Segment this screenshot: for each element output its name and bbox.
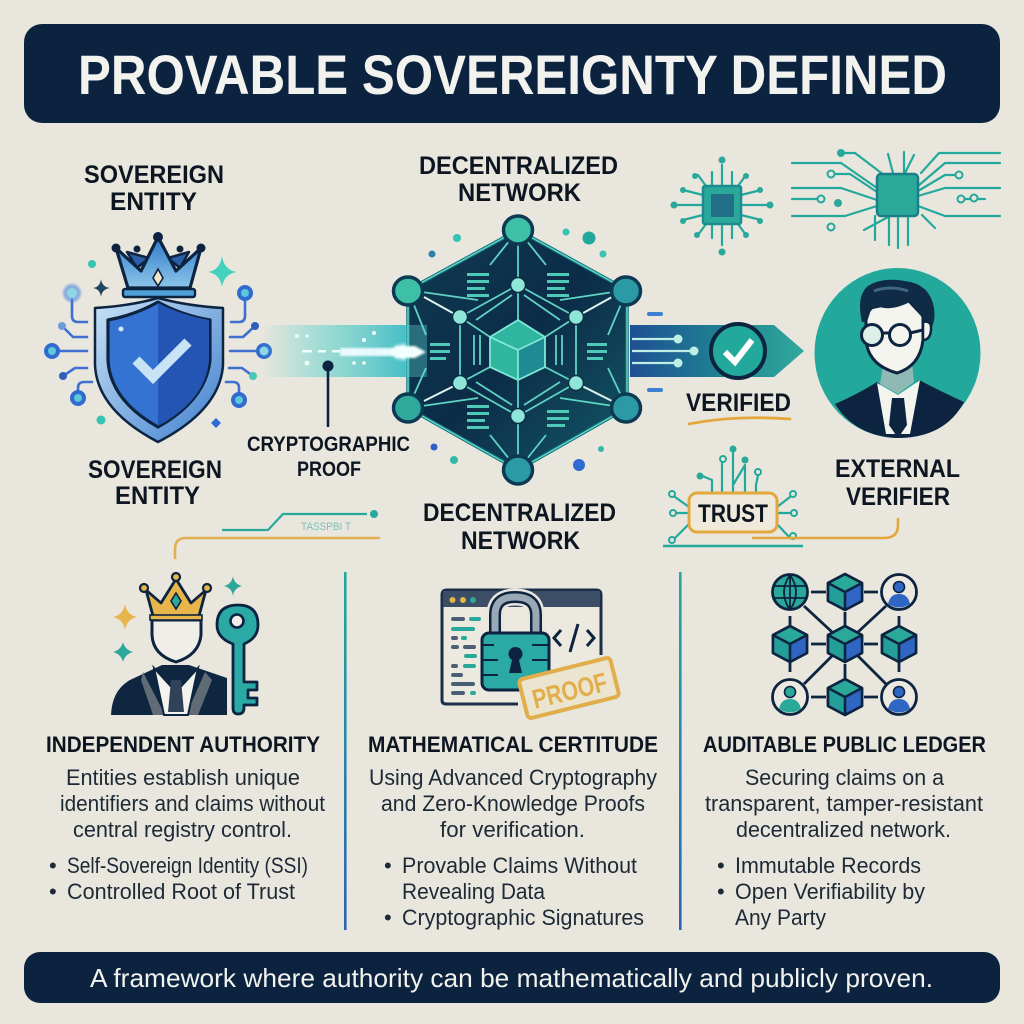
label: sovereign entity (top) xyxy=(84,161,224,216)
description: and Zero-Knowledge Proofs xyxy=(381,791,645,816)
description xyxy=(705,765,983,842)
network: hexagon of nodes xyxy=(394,216,640,484)
shield xyxy=(95,298,223,442)
crown xyxy=(146,579,206,616)
bullets: Cryptographic Signatures xyxy=(402,905,644,930)
label: sovereign entity (bottom): ENTITY xyxy=(115,482,200,510)
connector: orange and teal lines to column one xyxy=(175,510,379,558)
padlock xyxy=(482,597,549,690)
icon: shield with crown and circuits xyxy=(44,232,272,442)
callout: cryptographic proof xyxy=(247,360,410,481)
label: sovereign entity (top): ENTITY xyxy=(110,188,197,216)
globe xyxy=(772,574,808,610)
center cube xyxy=(490,320,545,380)
label: external verifier: EXTERNAL xyxy=(835,455,960,483)
bullets: • xyxy=(49,879,57,904)
floating dots xyxy=(428,228,606,471)
icon: proof lock in browser xyxy=(442,590,619,719)
code glyph xyxy=(554,624,594,652)
sparkles xyxy=(113,604,137,630)
label: sovereign entity (bottom): SOVEREIGN xyxy=(88,456,222,484)
title banner xyxy=(24,24,1000,123)
icon: small chip xyxy=(670,156,774,256)
description: Entities establish unique xyxy=(66,765,300,790)
heading: AUDITABLE PUBLIC LEDGER xyxy=(703,732,986,757)
label: decentralized network (top): DECENTRALIZED xyxy=(419,152,618,180)
bullets: Any Party xyxy=(735,905,826,930)
bullets: Immutable Records xyxy=(735,853,921,878)
icon: trust circuit: TRUST xyxy=(698,500,768,528)
key xyxy=(217,605,258,714)
bullets: Controlled Root of Trust xyxy=(67,879,295,904)
label: decentralized network (bottom): NETWORK xyxy=(461,527,580,555)
panel: mathematical certitude xyxy=(368,732,658,930)
proof stamp: PROOF xyxy=(529,667,610,715)
bullets: • xyxy=(384,853,392,878)
bullets: Open Verifiability by xyxy=(735,879,925,904)
description: central registry control. xyxy=(73,817,292,842)
sparkles xyxy=(88,256,237,428)
divider xyxy=(679,572,682,930)
icon: trust circuit xyxy=(663,446,803,546)
bullets: • xyxy=(717,853,725,878)
footer banner: A framework where authority can be mathematically and publicly proven. xyxy=(90,963,933,993)
label: decentralized network (bottom) xyxy=(423,499,616,555)
description: decentralized network. xyxy=(736,817,951,842)
description xyxy=(60,765,325,842)
description: transparent, tamper-resistant xyxy=(705,791,983,816)
arrow: cryptographic proof beam xyxy=(260,325,428,377)
icon: independent authority person with crown and key xyxy=(111,573,258,715)
bullets: • xyxy=(384,905,392,930)
connector: verifier to trust xyxy=(753,519,898,538)
heading: INDEPENDENT AUTHORITY xyxy=(46,732,320,757)
suit xyxy=(111,665,227,715)
circuits around the shield xyxy=(44,284,272,408)
heading: MATHEMATICAL CERTITUDE xyxy=(368,732,658,757)
bullets xyxy=(717,853,925,930)
label: decentralized network (top) xyxy=(419,152,618,207)
description: Securing claims on a xyxy=(745,765,945,790)
icon: large chip with circuit traces xyxy=(792,149,1000,248)
label: verified: VERIFIED xyxy=(686,389,791,417)
panel: auditable public ledger xyxy=(703,732,986,930)
panel: independent authority xyxy=(46,732,325,904)
bullets: Revealing Data xyxy=(402,879,546,904)
data glyphs xyxy=(430,273,607,429)
icon: public ledger node graph xyxy=(772,574,916,715)
graph links xyxy=(790,592,899,697)
label: decentralized network (bottom): DECENTRALIZED xyxy=(423,499,616,527)
bullets xyxy=(384,853,644,930)
description: Using Advanced Cryptography xyxy=(369,765,657,790)
user nodes xyxy=(772,574,916,714)
divider xyxy=(344,572,347,930)
description: for verification. xyxy=(440,817,585,842)
outer nodes xyxy=(394,216,640,484)
description xyxy=(369,765,657,842)
label: external verifier xyxy=(835,455,960,511)
footer banner xyxy=(24,952,1000,1003)
label: sovereign entity (bottom) xyxy=(88,456,222,510)
label: decentralized network (top): NETWORK xyxy=(458,179,581,207)
bullets: • xyxy=(49,853,57,878)
cubes xyxy=(828,574,862,610)
beam overlay into network xyxy=(395,325,427,377)
label: sovereign entity (top): SOVEREIGN xyxy=(84,161,224,189)
head xyxy=(152,620,201,662)
inner nodes xyxy=(452,278,584,424)
description: identifiers and claims without xyxy=(60,791,325,816)
arrow: verified xyxy=(630,312,804,392)
label: external verifier: VERIFIER xyxy=(846,483,950,511)
callout: cryptographic proof: CRYPTOGRAPHIC xyxy=(247,433,410,456)
icon: verified check xyxy=(711,324,765,378)
icon: external verifier portrait xyxy=(814,268,980,438)
bullets: Self-Sovereign Identity (SSI) xyxy=(67,853,308,878)
bullets: • xyxy=(717,879,725,904)
bullets xyxy=(49,853,308,904)
crown xyxy=(112,232,206,297)
bullets: Provable Claims Without xyxy=(402,853,637,878)
network spokes xyxy=(408,230,627,470)
connector: orange and teal lines to column one: TASSPBI T xyxy=(301,521,351,533)
callout: cryptographic proof: PROOF xyxy=(297,458,361,481)
